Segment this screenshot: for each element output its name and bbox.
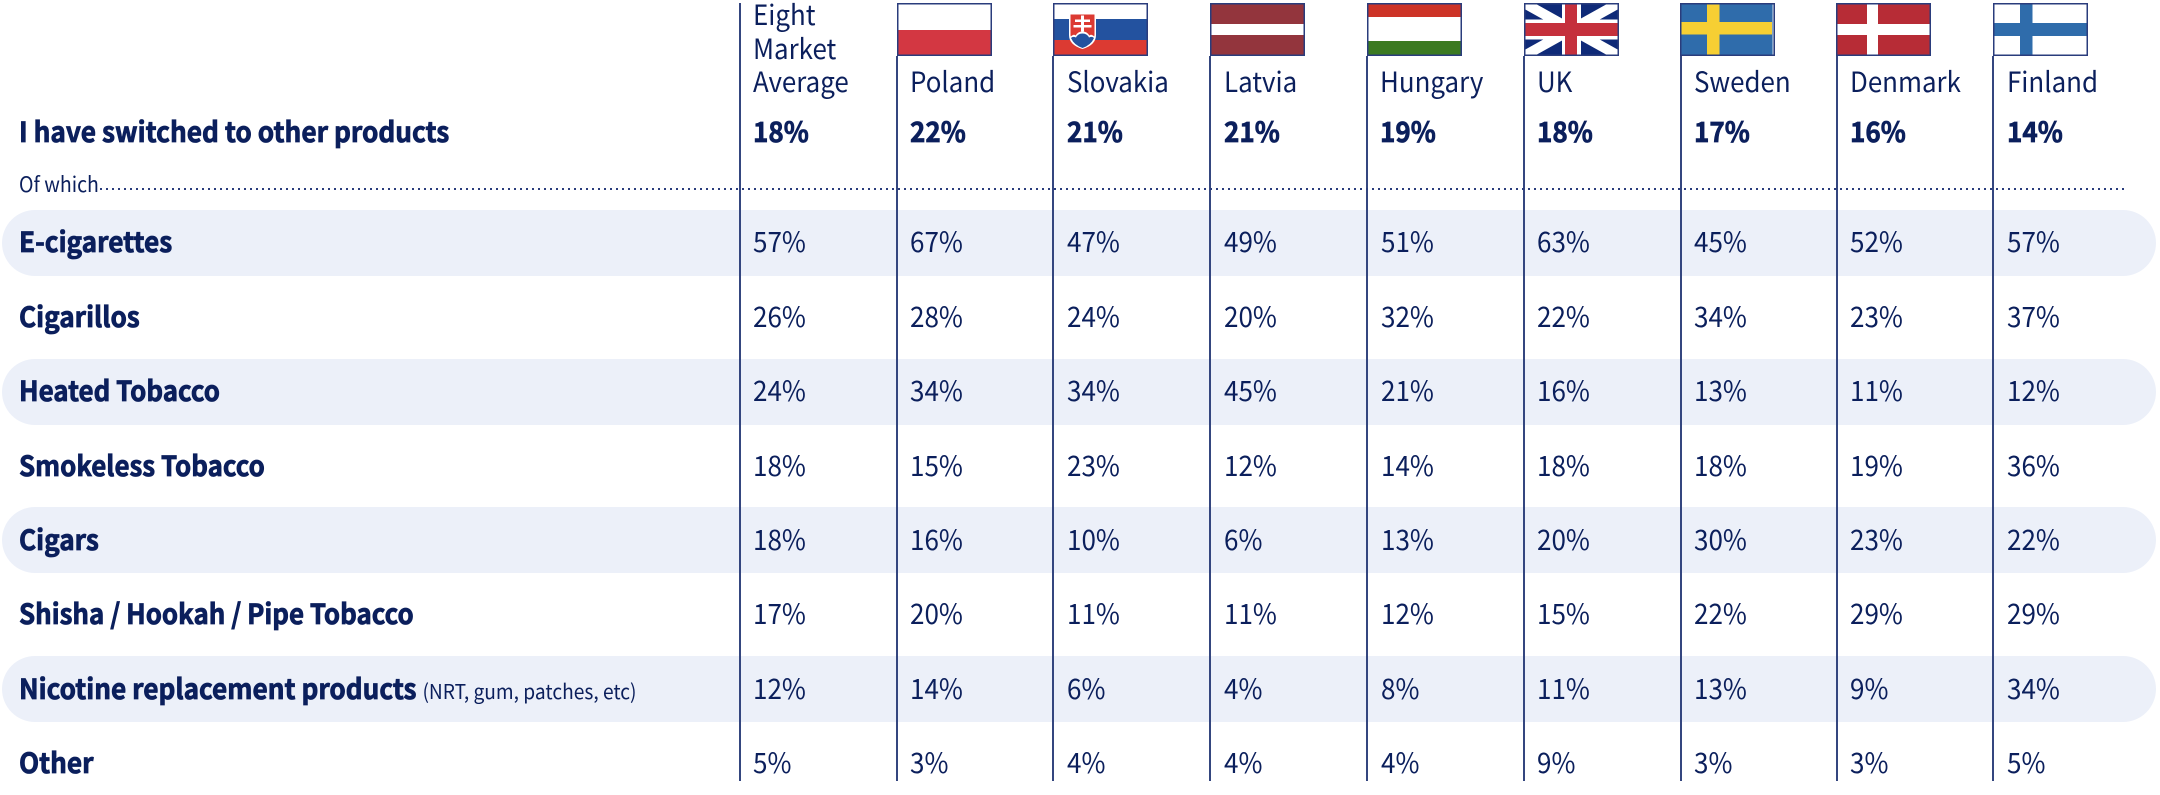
table row: Shisha / Hookah / Pipe Tobacco: 17% — [753, 593, 806, 633]
value: Denmark: 16% — [1850, 111, 1906, 151]
table row: Cigars: 20% — [1537, 519, 1590, 559]
flag: Sweden — [1680, 3, 1775, 56]
table row: Shisha / Hookah / Pipe Tobacco: Shisha / Hookah / Pipe Tobacco — [19, 593, 414, 633]
table row: Cigars — [2, 507, 2156, 573]
column header: Eight Market Average — [753, 0, 849, 101]
column header: UK: UK — [1537, 61, 1572, 101]
table row: Other: 4% — [1067, 742, 1105, 782]
table row: E-cigarettes: 49% — [1224, 221, 1277, 261]
table row: Cigarillos: 22% — [1537, 296, 1590, 336]
table row: Shisha / Hookah / Pipe Tobacco: 12% — [1381, 593, 1434, 633]
table row: E-cigarettes — [2, 210, 2156, 276]
table row: Other: 4% — [1224, 742, 1262, 782]
table row: Cigarillos: 23% — [1850, 296, 1903, 336]
flag: Finland — [1993, 3, 2088, 56]
table row: Other — [19, 742, 2045, 782]
value: Latvia: 21% — [1224, 111, 1280, 151]
table row: Cigars: 16% — [910, 519, 963, 559]
table row: Heated Tobacco: 16% — [1537, 370, 1590, 410]
table row: Smokeless Tobacco: 18% — [753, 445, 806, 485]
table row: Nicotine replacement products: 6% — [1067, 668, 1105, 708]
table row: Other: Other — [19, 742, 94, 782]
table row: Nicotine replacement products: 11% — [1537, 668, 1590, 708]
table row: E-cigarettes: 47% — [1067, 221, 1120, 261]
column header: Denmark: Denmark — [1850, 61, 1961, 101]
table row: Cigars: 18% — [753, 519, 806, 559]
table row: Heated Tobacco — [2, 358, 2156, 424]
table row: Other: 4% — [1381, 742, 1419, 782]
column header: Eight Market Average: Market — [753, 28, 836, 68]
table row: Nicotine replacement products: 4% — [1224, 668, 1262, 708]
table row: Cigars: 23% — [1850, 519, 1903, 559]
value: Finland: 14% — [2007, 111, 2063, 151]
table row: Shisha / Hookah / Pipe Tobacco: 15% — [1537, 593, 1590, 633]
table row: Heated Tobacco: Heated Tobacco — [19, 370, 220, 410]
flag: Slovakia — [1053, 3, 1148, 56]
table row: Smokeless Tobacco: 23% — [1067, 445, 1120, 485]
table row: Smokeless Tobacco — [19, 445, 2060, 485]
column header: Finland: Finland — [2007, 61, 2098, 101]
flag: Latvia — [1210, 3, 1305, 56]
value: Eight Market Average: 18% — [753, 111, 809, 151]
heading: I have switched to other products: I have switched to other products — [19, 111, 449, 151]
table row: Smokeless Tobacco: 18% — [1694, 445, 1747, 485]
table row: Cigarillos — [19, 296, 2060, 336]
table row: Nicotine replacement products: 14% — [910, 668, 963, 708]
table row: E-cigarettes: E-cigarettes — [19, 221, 172, 261]
table row: Nicotine replacement products: 9% — [1850, 668, 1888, 708]
table row: Smokeless Tobacco: 15% — [910, 445, 963, 485]
column header: Hungary: Hungary — [1380, 61, 1483, 101]
table row: Other: 3% — [910, 742, 948, 782]
table row: Nicotine replacement products — [2, 656, 2156, 722]
table row: Cigarillos: Cigarillos — [19, 296, 140, 336]
table row: Other: 5% — [2007, 742, 2045, 782]
table row: Cigarillos: 32% — [1381, 296, 1434, 336]
table row: Shisha / Hookah / Pipe Tobacco: 20% — [910, 593, 963, 633]
table row: Cigars: 13% — [1381, 519, 1434, 559]
table row: Shisha / Hookah / Pipe Tobacco: 29% — [2007, 593, 2060, 633]
table row: Nicotine replacement products: 12% — [753, 668, 806, 708]
value: Hungary: 19% — [1380, 111, 1436, 151]
table row: Cigarillos: 20% — [1224, 296, 1277, 336]
flag: UK — [1524, 3, 1619, 56]
table row: Heated Tobacco: 24% — [753, 370, 806, 410]
table row: Cigarillos: 26% — [753, 296, 806, 336]
table row: Shisha / Hookah / Pipe Tobacco — [19, 593, 2060, 633]
table row: Cigars: 22% — [2007, 519, 2060, 559]
value: Sweden: 17% — [1694, 111, 1750, 151]
table row: Cigarillos: 24% — [1067, 296, 1120, 336]
flag: Hungary — [1367, 3, 1462, 56]
table row: Smokeless Tobacco: 14% — [1381, 445, 1434, 485]
value: Poland: 22% — [910, 111, 966, 151]
table row: Shisha / Hookah / Pipe Tobacco: 11% — [1067, 593, 1120, 633]
table row: Cigars: Cigars — [19, 519, 99, 559]
table row: Shisha / Hookah / Pipe Tobacco: 22% — [1694, 593, 1747, 633]
table row: E-cigarettes: 57% — [753, 221, 806, 261]
table row: Heated Tobacco: 34% — [1067, 370, 1120, 410]
table row: Nicotine replacement products: Nicotine replacement products (NRT, gum, patches, etc) — [19, 668, 637, 708]
table row: Cigars: 6% — [1224, 519, 1262, 559]
flag: Denmark — [1836, 3, 1931, 56]
table row: Smokeless Tobacco: 12% — [1224, 445, 1277, 485]
table row: Nicotine replacement products: 8% — [1381, 668, 1419, 708]
table row: Cigars: 10% — [1067, 519, 1120, 559]
flag: Poland — [897, 3, 992, 56]
table row: Other: 5% — [753, 742, 791, 782]
table row: Smokeless Tobacco: 36% — [2007, 445, 2060, 485]
table row: E-cigarettes: 63% — [1537, 221, 1590, 261]
table row: E-cigarettes: 57% — [2007, 221, 2060, 261]
column header: Eight Market Average: Average — [753, 61, 849, 101]
table row: Smokeless Tobacco: 18% — [1537, 445, 1590, 485]
table row: Other: 3% — [1850, 742, 1888, 782]
column header: Poland: Poland — [910, 61, 995, 101]
value: Slovakia: 21% — [1067, 111, 1123, 151]
column header: Latvia: Latvia — [1224, 61, 1297, 101]
table row: Nicotine replacement products: 13% — [1694, 668, 1747, 708]
table row: E-cigarettes: 52% — [1850, 221, 1903, 261]
table row: Cigarillos: 34% — [1694, 296, 1747, 336]
table row: Nicotine replacement products: 34% — [2007, 668, 2060, 708]
table row: E-cigarettes: 67% — [910, 221, 963, 261]
sub-heading: Of which: Of which — [19, 168, 99, 198]
table row: Heated Tobacco: 21% — [1381, 370, 1434, 410]
table row: Smokeless Tobacco: 19% — [1850, 445, 1903, 485]
table row: Shisha / Hookah / Pipe Tobacco: 29% — [1850, 593, 1903, 633]
table row: Other: 9% — [1537, 742, 1575, 782]
table row: Heated Tobacco: 34% — [910, 370, 963, 410]
table row: Cigars: 30% — [1694, 519, 1747, 559]
table row: Cigarillos: 28% — [910, 296, 963, 336]
value: UK: 18% — [1537, 111, 1593, 151]
table row: Shisha / Hookah / Pipe Tobacco: 11% — [1224, 593, 1277, 633]
table row: Heated Tobacco: 12% — [2007, 370, 2060, 410]
table row: Smokeless Tobacco: Smokeless Tobacco — [19, 445, 265, 485]
table row: Cigarillos: 37% — [2007, 296, 2060, 336]
table row: Heated Tobacco: 45% — [1224, 370, 1277, 410]
table row: E-cigarettes: 51% — [1381, 221, 1434, 261]
table row: Heated Tobacco: 11% — [1850, 370, 1903, 410]
table row: E-cigarettes: 45% — [1694, 221, 1747, 261]
table row: Heated Tobacco: 13% — [1694, 370, 1747, 410]
column header: Slovakia: Slovakia — [1067, 61, 1169, 101]
table row: Other: 3% — [1694, 742, 1732, 782]
column header: Sweden: Sweden — [1694, 61, 1791, 101]
